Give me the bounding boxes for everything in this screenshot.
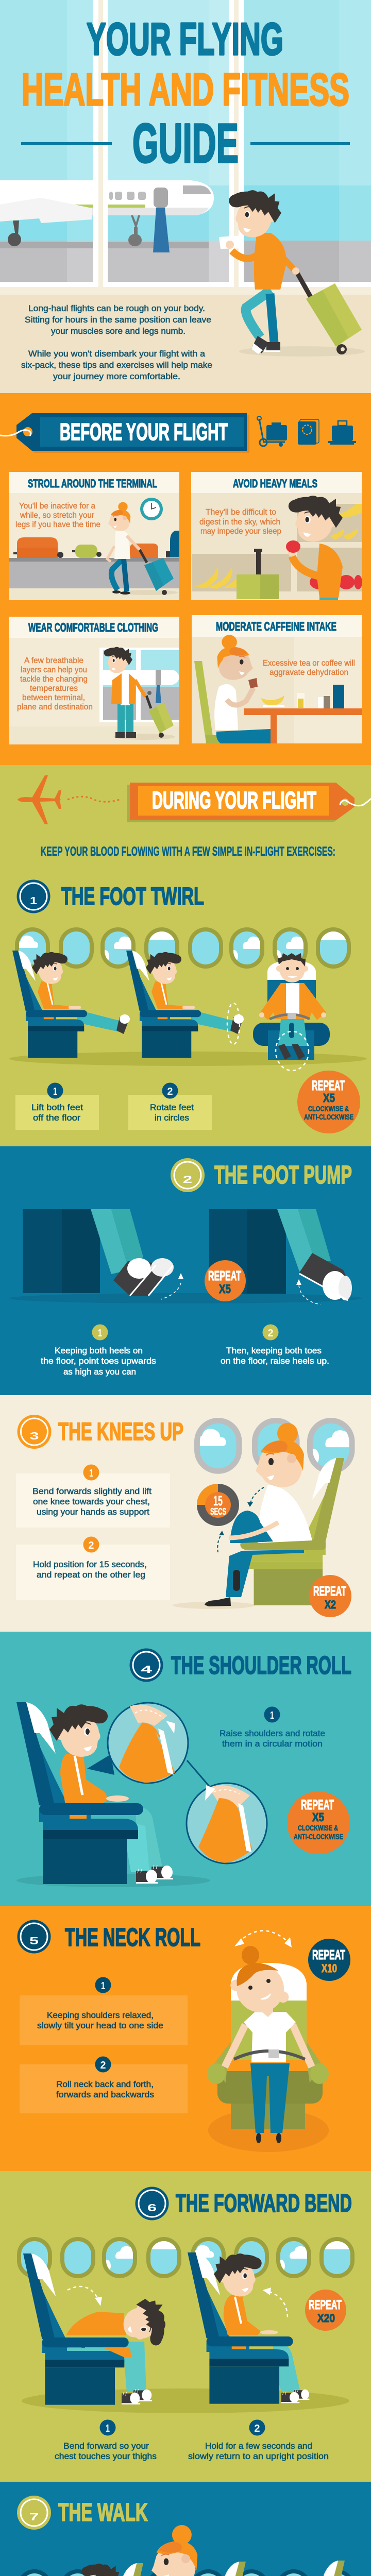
card: wear comfortable clothing: A few breathable	[24, 656, 83, 665]
card: moderate caffeine intake: Excessive tea or coffee will	[263, 659, 355, 668]
step 2: on the floor, raise heels up.	[221, 1356, 329, 1366]
card: avoid heavy meals: digest in the sky, which	[199, 518, 280, 527]
callout: repeat x2: X2	[325, 1598, 336, 1611]
callout: repeat x5: REPEAT	[312, 1078, 345, 1093]
plane	[0, 180, 214, 246]
card: stroll around the terminal: while, so stretch your	[20, 511, 95, 520]
callout: repeat x5: X5	[323, 1091, 335, 1105]
step 1	[41, 1324, 156, 1377]
callout: repeat x5: X5	[219, 1282, 231, 1296]
step 2: slowly return to an upright position	[188, 2451, 329, 2461]
callout: repeat x5: REPEAT	[208, 1268, 241, 1283]
floor shadow	[9, 1293, 362, 1303]
arrow: neck movement	[234, 1931, 292, 1947]
card: avoid heavy meals: They'll be difficult to	[206, 508, 276, 517]
callout: repeat x10: REPEAT	[312, 1947, 345, 1962]
callout: repeat x5: CLOCKWISE &	[308, 1105, 349, 1113]
illustration: man with suitcase	[219, 190, 365, 357]
plane windows	[194, 1418, 356, 1474]
heading: the walk: THE WALK	[58, 2499, 148, 2527]
icon: plane	[18, 775, 61, 824]
step 1: Keeping shoulders relaxed,	[47, 2010, 154, 2020]
card: wear comfortable clothing: between terminal,	[22, 693, 85, 702]
card: wear comfortable clothing: layers can help you	[21, 666, 87, 674]
step 1: Keeping both heels on	[55, 1346, 143, 1355]
panel: the neck roll	[0, 1906, 371, 2171]
illustration: man bent forward	[23, 2253, 165, 2405]
callout: repeat x5	[205, 1260, 246, 1301]
step 2	[221, 1324, 329, 1366]
step 1	[55, 2419, 157, 2461]
table with breakfast	[244, 685, 362, 743]
callout: repeat x10	[308, 1939, 350, 1981]
callout: repeat x20	[305, 2290, 346, 2331]
badge: 2: 2	[183, 1174, 192, 1185]
illustration: seated man, feet lifted	[12, 951, 130, 1058]
icon: baggage carousel	[328, 421, 356, 445]
callout: repeat x5: REPEAT	[301, 1797, 334, 1812]
step 1: 1	[101, 1980, 105, 1992]
floor shadow	[9, 1052, 367, 1066]
title	[21, 13, 350, 174]
badge: 3: 3	[30, 1431, 39, 1442]
illustration: woman with suitcase	[107, 502, 178, 595]
step 2: forwards and backwards	[56, 2090, 154, 2099]
heading: the foot twirl: THE FOOT TWIRL	[61, 883, 204, 910]
magnifier: shoulder down	[187, 1783, 267, 1863]
step 1: Raise shoulders and rotate	[220, 1728, 325, 1738]
callout: repeat x20: REPEAT	[309, 2298, 342, 2312]
card: wear comfortable clothing: temperatures	[30, 684, 78, 693]
heading: the neck roll: THE NECK ROLL	[65, 1924, 200, 1952]
step 1: 1	[89, 1468, 93, 1479]
suitcase	[237, 549, 279, 599]
step 1: 1	[53, 1086, 57, 1097]
icon: clock	[140, 498, 163, 520]
luggage on carousel	[13, 531, 179, 558]
badge: 4	[130, 1649, 163, 1682]
panel: the shoulder roll	[0, 1632, 371, 1906]
intro text: your muscles sore and legs numb.	[51, 326, 185, 336]
badge: 2	[171, 1158, 205, 1192]
illustration: woman rolling neck	[207, 1946, 329, 2152]
card: stroll around the terminal	[9, 472, 179, 600]
badge: 6	[135, 2187, 169, 2221]
badge: 5: 5	[29, 1936, 39, 1947]
floor shadow	[22, 2388, 349, 2413]
step 1	[15, 1083, 99, 1130]
step 2: 2	[268, 1328, 273, 1339]
step 2	[128, 1083, 212, 1130]
illustration: seated man	[16, 1702, 173, 1884]
step 1: Bend forward so your	[63, 2441, 149, 2451]
timer: 15 secs: SECS	[210, 1506, 226, 1517]
step 1: using your hands as support	[37, 1507, 149, 1517]
step 1: 1	[270, 1710, 274, 1721]
badge: 5	[18, 1920, 50, 1954]
step 2: and repeat on the other leg	[37, 1570, 145, 1580]
airport window	[99, 648, 179, 722]
step 1: slowly tilt your head to one side	[37, 2021, 163, 2030]
card: wear comfortable clothing: WEAR COMFORTABLE CLOTHING	[28, 621, 158, 635]
card: moderate caffeine intake	[192, 615, 362, 743]
icon: luggage trolley	[257, 416, 287, 447]
step 1: Bend forwards slightly and lift	[32, 1486, 151, 1496]
callout: repeat x5: ANTI-CLOCKWISE	[294, 1833, 343, 1841]
panel: airport window hero	[0, 0, 371, 295]
icon: passport	[298, 419, 319, 445]
dotted flight path	[68, 796, 120, 802]
panel: the knees up	[0, 1396, 371, 1632]
card: avoid heavy meals: AVOID HEAVY MEALS	[233, 477, 317, 490]
step 1	[220, 1706, 325, 1749]
step 1: one knee towards your chest,	[33, 1497, 150, 1506]
step 2: 2	[89, 1540, 94, 1551]
badge: 7	[17, 2496, 51, 2530]
card: moderate caffeine intake: aggravate dehydration	[269, 668, 348, 677]
callout: repeat x5	[287, 1791, 350, 1854]
step 2: Hold position for 15 seconds,	[33, 1560, 147, 1569]
card: stroll around the terminal: You'll be inactive for a	[19, 502, 95, 511]
intro text: your journey more comfortable.	[53, 371, 180, 381]
magnifier: shoulder up	[87, 1703, 209, 1786]
title: GUIDE	[132, 112, 239, 174]
heading: the knees up: THE KNEES UP	[58, 1418, 183, 1446]
tag heading: before your flight: BEFORE YOUR FLIGHT	[60, 418, 228, 445]
callout: repeat x5: ANTI-CLOCKWISE	[304, 1113, 353, 1122]
plane windows	[17, 2569, 355, 2576]
badge: 4: 4	[141, 1664, 153, 1675]
step 2	[188, 2419, 329, 2461]
step 2: Then, keeping both toes	[226, 1346, 322, 1355]
card: wear comfortable clothing	[9, 617, 179, 744]
illustration: man with apple	[286, 496, 343, 600]
illustration: man in layers	[104, 647, 175, 740]
panel: the walk	[0, 2483, 371, 2576]
illustration: seated man, feet rotating	[126, 951, 244, 1058]
illustration: walking woman	[142, 2525, 219, 2576]
intro floor panel	[0, 295, 371, 393]
step 1	[20, 1977, 188, 2045]
seats	[60, 2561, 345, 2576]
callout: repeat x2	[309, 1575, 351, 1617]
intro text: six-pack, these tips and exercises will help make	[21, 360, 212, 370]
callout: repeat x2: REPEAT	[313, 1583, 346, 1599]
callout: repeat x5	[297, 1071, 360, 1133]
card: stroll around the terminal: legs if you have the time	[15, 520, 100, 529]
step 1	[16, 1464, 170, 1528]
callout: repeat x5: X5	[312, 1810, 324, 1824]
step 2: in circles	[155, 1113, 189, 1123]
badge: 1: 1	[30, 895, 37, 907]
floor shadow	[16, 1874, 210, 1887]
callout: repeat x20: X20	[317, 2312, 335, 2325]
intro text: While you won't disembark your flight with a	[28, 349, 206, 359]
step 1: 1	[98, 1328, 102, 1339]
intro text: Sitting for hours in the same position can leave	[25, 315, 211, 325]
illustration: woman lifting knee	[173, 1423, 344, 1609]
illustration: heels up	[209, 1209, 352, 1304]
badge: 6: 6	[147, 2202, 157, 2214]
card: wear comfortable clothing: plane and destination	[17, 703, 93, 711]
plane windows	[17, 2237, 355, 2278]
illustration: seated man	[36, 2564, 125, 2576]
badge: 7: 7	[29, 2512, 39, 2523]
step 1: the floor, point toes upwards	[41, 1356, 156, 1366]
card: avoid heavy meals: may impede your sleep	[200, 527, 281, 536]
intro text	[21, 303, 212, 381]
badge: 1	[16, 880, 50, 913]
panel: the forward bend	[0, 2171, 371, 2483]
step 1: Lift both feet	[31, 1103, 83, 1112]
badge: 3	[18, 1415, 52, 1449]
timer: 15 secs: 15	[213, 1493, 223, 1509]
step 1: chest touches your thighs	[55, 2451, 157, 2461]
card: stroll around the terminal: STROLL AROUND THE TERMINAL	[28, 477, 157, 490]
step 2: 2	[255, 2423, 260, 2434]
step 2: Roll neck back and forth,	[56, 2079, 154, 2089]
step 1: 1	[106, 2423, 110, 2434]
timer: 15 secs	[197, 1484, 239, 1526]
step 2: 2	[167, 1086, 173, 1097]
panel: the foot pump	[0, 1146, 371, 1396]
tag heading: before your flight	[0, 413, 249, 453]
step 1: as high as you can	[63, 1367, 136, 1377]
food shelves	[194, 504, 362, 589]
step 2	[16, 1536, 170, 1600]
step 1: them in a circular motion	[222, 1739, 323, 1749]
illustration: woman drinking	[194, 635, 271, 743]
illustration: man upright	[188, 2252, 309, 2404]
jet bridge stand	[153, 188, 170, 252]
panel: during your flight + foot twirl	[0, 765, 371, 1146]
illustration: toes up	[23, 1209, 183, 1299]
arrows: timer cycle	[217, 1487, 264, 1552]
arrows: forward movement	[68, 2286, 288, 2318]
callout: repeat x10: X10	[322, 1962, 337, 1975]
step 2: 2	[100, 2060, 106, 2071]
card: wear comfortable clothing: tackle the changing	[20, 675, 88, 684]
panel: before your flight	[0, 393, 371, 765]
step 2: Hold for a few seconds and	[205, 2441, 312, 2451]
step 2	[20, 2057, 188, 2113]
plane windows	[15, 927, 351, 969]
callout: repeat x5: CLOCKWISE &	[298, 1824, 338, 1833]
step 2: Rotate feet	[150, 1103, 194, 1112]
tag heading: during your flight	[127, 783, 371, 822]
step 1: off the floor	[33, 1113, 80, 1123]
illustration: seated man, front view	[253, 953, 330, 1071]
card: avoid heavy meals	[191, 472, 362, 600]
intro text: Long-haul flights can be rough on your body.	[28, 303, 205, 313]
